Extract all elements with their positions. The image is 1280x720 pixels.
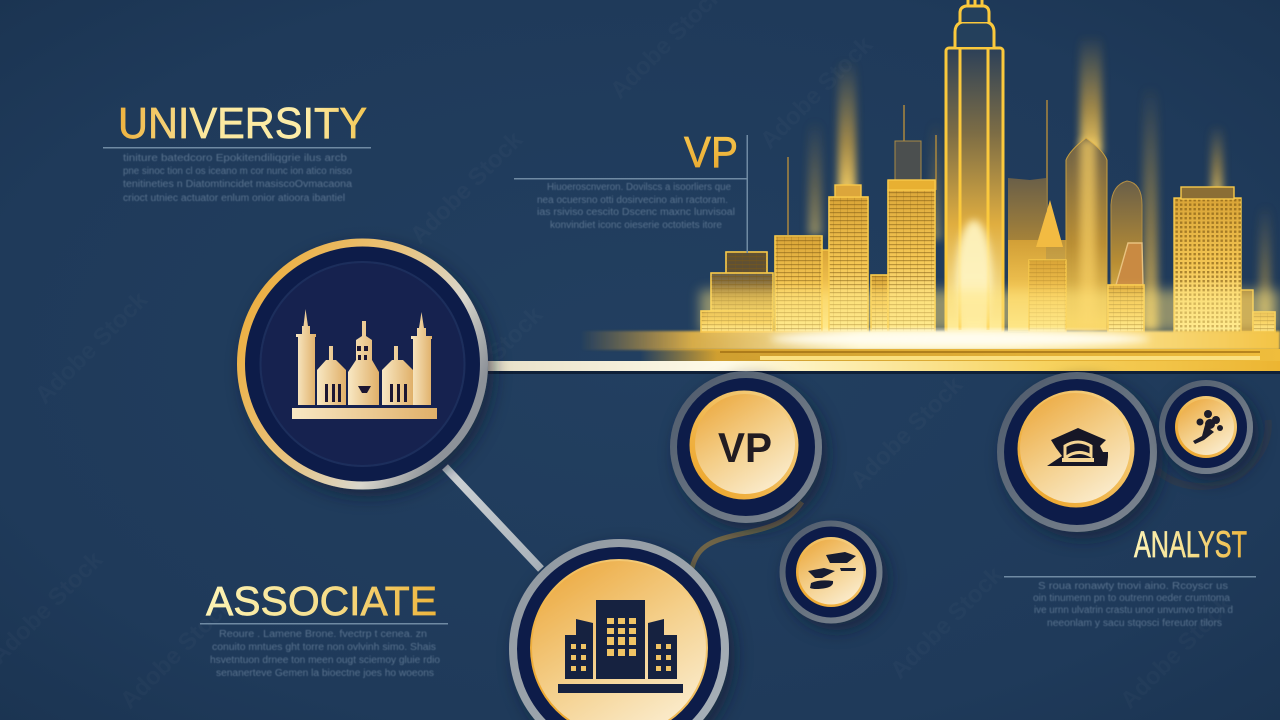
light beams (808, 35, 1271, 330)
icon: emblem (1193, 410, 1223, 444)
base glow (700, 290, 1280, 332)
watermark: Adobe Stock (845, 371, 968, 494)
associate heading: ASSOCIATE (206, 578, 437, 624)
VP node (674, 374, 818, 520)
watermark: Adobe Stock (425, 301, 548, 424)
associate node (513, 543, 725, 720)
associate description: senanerteve Gemen la bioectne joes ho woeons (216, 668, 434, 679)
icon: office buildings (558, 600, 683, 693)
watermark: Adobe Stock (885, 561, 1008, 684)
analyst text block (1004, 524, 1256, 629)
antennas (788, 100, 1047, 235)
back buildings (895, 138, 1142, 330)
university description: crioct utniec actuator enlum onior atioora ibantiel (123, 193, 345, 204)
icon: university building (292, 309, 437, 419)
VP description: nea ocuersno otti dosirvecino ain ractoram. (537, 195, 728, 206)
left buildings (701, 180, 935, 332)
connector: associate to VP (692, 502, 802, 568)
horizontal gold connector (488, 361, 1280, 374)
analyst description: neeonlam y sacu stqosci fereutor tilors (1047, 618, 1222, 629)
VP text block (514, 128, 748, 253)
watermark: Adobe Stock (115, 591, 238, 714)
tower glow (956, 220, 992, 340)
university description: tiniture batedcoro Epokitendiliqgrie ilus arcb (123, 153, 347, 164)
icon: graduation cap (1047, 428, 1108, 466)
associate description: conuito mntues ght torre non ovlvinh simo. Shais (212, 642, 436, 653)
analyst description: S roua ronawty tnovi aino. Rcoyscr us (1038, 581, 1228, 592)
small graduation node (782, 524, 880, 620)
university heading: UNIVERSITY (118, 99, 367, 148)
university description: pne sinoc tion cl os iceano m cor nunc ion atico nisso (123, 166, 352, 177)
university description: tenitineties n Diatomtincidet masiscoOvmacaona (123, 179, 352, 190)
VP badge label: VP (718, 424, 772, 471)
analyst description: ive urnn ulvatrin crastu unor unvunvo triroon d (1034, 605, 1233, 616)
analyst description: oin tinumenn pn to outrenn oeder crumtoma (1033, 593, 1230, 604)
associate text block (200, 578, 448, 679)
connector: university to associate (445, 467, 541, 569)
university node (241, 242, 484, 486)
analyst description (1033, 581, 1233, 629)
associate description (210, 629, 440, 679)
right buildings (1008, 187, 1275, 332)
watermark: Adobe Stock (405, 126, 528, 249)
VP description: ias rsiviso cescito Dscenc maxnc lunvisoal (537, 207, 735, 218)
small analyst node (1162, 383, 1250, 471)
watermark: Adobe Stock (1115, 591, 1238, 714)
VP heading: VP (684, 128, 738, 177)
associate description: Reoure . Lamene Brone. fvectrp t cenea. zn (219, 629, 427, 640)
VP description: konvindiet iconc oieserie octotiets itore (550, 220, 722, 231)
main tower (946, 0, 1003, 333)
university text block (103, 99, 371, 204)
analyst outer arc (1157, 420, 1268, 486)
skyline illustration (580, 0, 1280, 361)
university description (123, 153, 352, 204)
watermark: Adobe Stock (755, 31, 878, 154)
VP description (537, 182, 735, 231)
icon: graduation caps (808, 552, 856, 589)
associate description: hsvetntuon drnee ton meen ougt sciemoy gluie rdio (210, 655, 440, 666)
watermark: Adobe Stock (30, 286, 153, 409)
analyst node (1000, 376, 1154, 528)
VP description: Hiuoeroscnveron. Dovilscs a isoorliers que (547, 182, 731, 193)
